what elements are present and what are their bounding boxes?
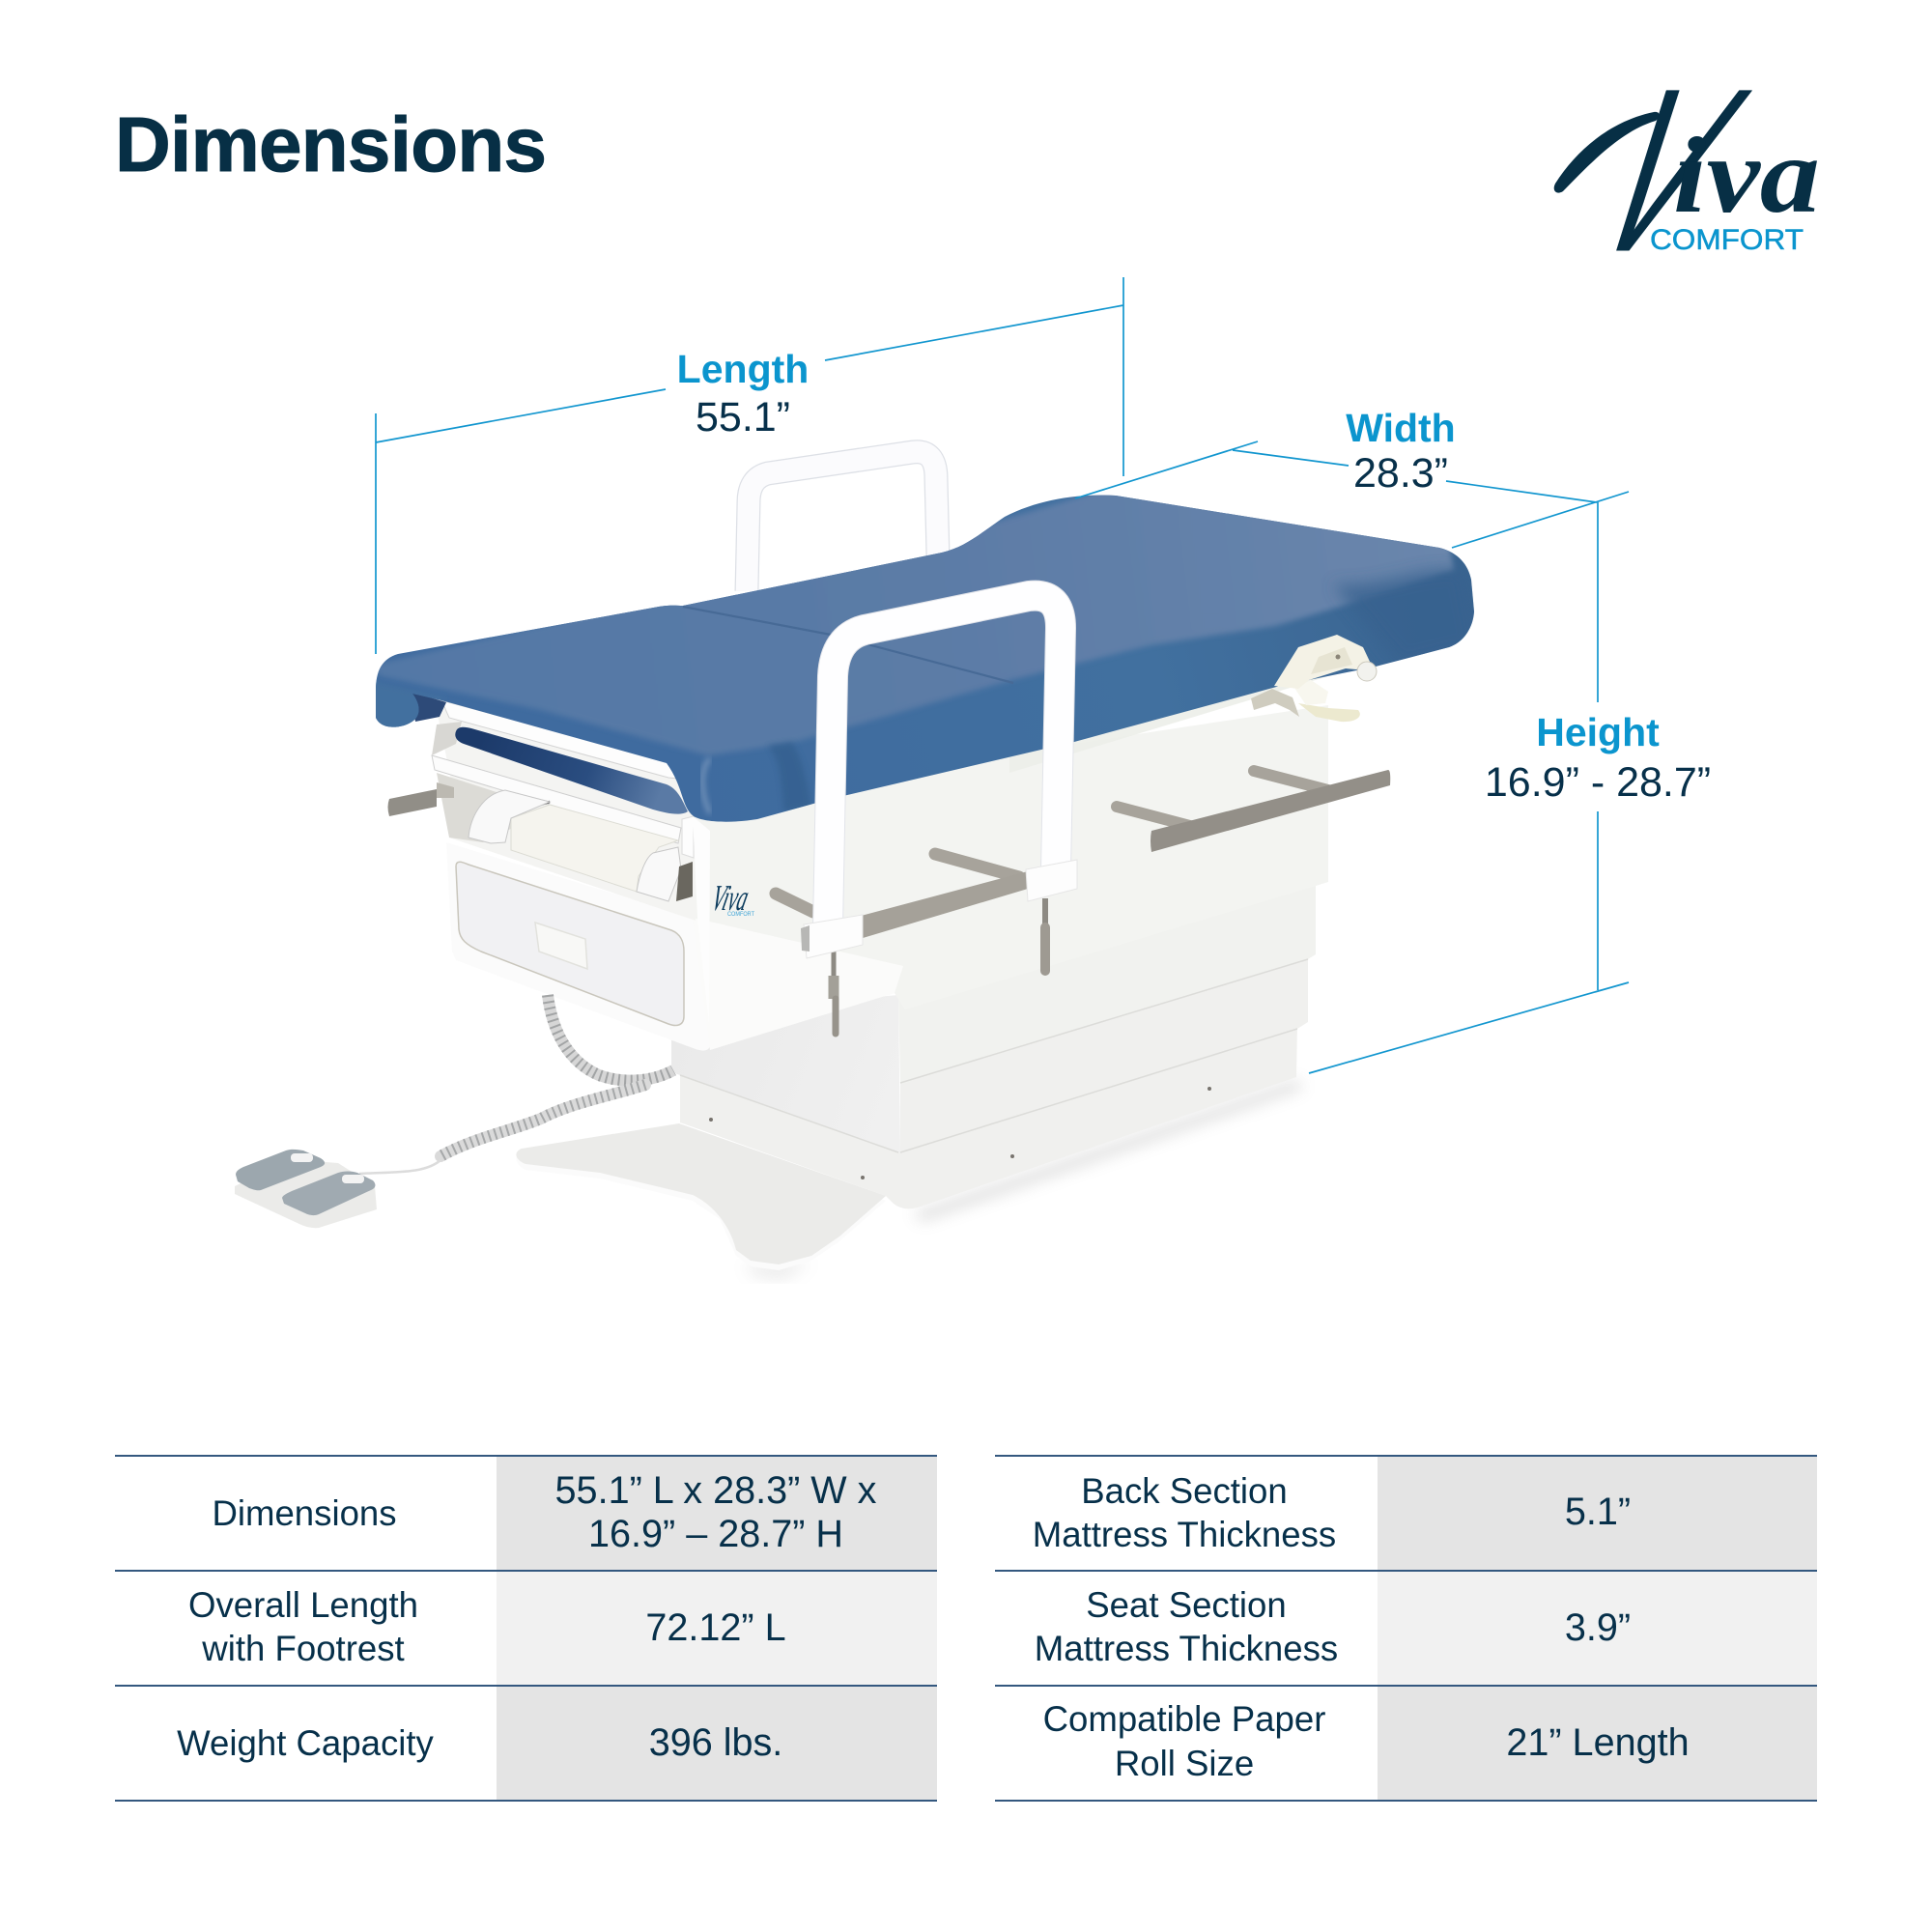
row: dimensions bbox=[212, 1469, 877, 1555]
right rod bbox=[1042, 898, 1048, 927]
mattress bbox=[367, 483, 1488, 831]
drawer handle bbox=[535, 923, 587, 969]
foot pedals bbox=[235, 1150, 377, 1228]
tier front face bbox=[671, 995, 900, 1152]
main housing bbox=[446, 676, 1328, 1051]
side face bbox=[693, 705, 1328, 1050]
left cover bbox=[469, 790, 550, 843]
row: back section: Mattress Thickness bbox=[1033, 1515, 1336, 1554]
coil to housing stripes bbox=[548, 995, 673, 1081]
row: weight capacity: 396 lbs. bbox=[649, 1721, 782, 1764]
back section shadow bbox=[1333, 569, 1478, 667]
top surface bbox=[367, 488, 1454, 755]
white plate bbox=[432, 755, 681, 843]
dark gap bbox=[511, 802, 550, 813]
height lines bbox=[1309, 502, 1629, 1073]
gray wall bbox=[437, 773, 526, 842]
row fills bbox=[497, 1456, 937, 1801]
tier 1 bbox=[898, 879, 1316, 1084]
row: paper roll: 21” Length bbox=[1506, 1721, 1690, 1764]
row: seat section: 3.9” bbox=[1565, 1606, 1631, 1649]
left metal handle bbox=[388, 789, 437, 816]
row: dimensions: Dimensions bbox=[212, 1493, 397, 1533]
left lip side shading bbox=[376, 680, 442, 727]
right clamp bbox=[1026, 860, 1077, 901]
dark recess behind lip bbox=[411, 692, 446, 722]
row: overall length bbox=[188, 1585, 786, 1668]
pin bbox=[1335, 655, 1341, 659]
mechanism back bbox=[437, 705, 696, 921]
tier 2 bbox=[900, 956, 1308, 1152]
corner notch shading bbox=[768, 742, 811, 811]
left rod bbox=[831, 952, 837, 978]
width dimension bbox=[1075, 406, 1629, 548]
length dimension bbox=[376, 277, 1123, 654]
row: seat section: Seat Section bbox=[1086, 1585, 1287, 1625]
footplate shadow bbox=[744, 1264, 811, 1279]
right pedal tag bbox=[342, 1175, 364, 1183]
logo word part: iva bbox=[1673, 116, 1820, 236]
width value: 28.3” bbox=[1353, 450, 1448, 497]
length lines bbox=[376, 277, 1123, 654]
gray upper block bbox=[432, 722, 462, 755]
seam left bbox=[683, 607, 1013, 683]
lift column tiers bbox=[671, 879, 1316, 1208]
clip stem bbox=[1294, 680, 1328, 705]
length label: Length bbox=[677, 347, 809, 391]
back rail bbox=[747, 452, 938, 591]
row: back section: 5.1” bbox=[1565, 1491, 1631, 1533]
panel patch bbox=[1009, 676, 1328, 773]
front rail bbox=[828, 596, 1061, 927]
row: overall length: with Footrest bbox=[201, 1629, 405, 1668]
bar bbox=[850, 871, 1028, 942]
row: paper roll: Compatible Paper bbox=[1043, 1699, 1325, 1739]
roller bbox=[1357, 662, 1377, 681]
length value: 55.1” bbox=[696, 394, 790, 440]
row: overall length: 72.12” L bbox=[645, 1606, 786, 1649]
front corner bbox=[693, 918, 903, 1050]
row rules bbox=[115, 1456, 937, 1801]
footswitch cord bbox=[359, 995, 673, 1174]
width lines bbox=[1075, 441, 1629, 548]
rail clamps and rods bbox=[801, 860, 1077, 1034]
left clamp bbox=[804, 915, 863, 958]
clip inner shade bbox=[1311, 647, 1352, 674]
clip foot bbox=[1298, 703, 1360, 722]
white paper plate bbox=[441, 700, 678, 779]
title: Dimensions bbox=[115, 101, 547, 187]
right side rail bbox=[1117, 770, 1390, 852]
motor box bbox=[511, 805, 678, 892]
left side rail bbox=[776, 854, 1028, 942]
left pedal tag bbox=[291, 1153, 313, 1162]
row: seat section bbox=[1035, 1585, 1631, 1668]
back pin bbox=[1254, 771, 1328, 790]
right pedal bbox=[282, 1171, 375, 1215]
logo subword: COMFORT bbox=[1650, 224, 1804, 256]
mini logo word: Viva bbox=[708, 879, 753, 919]
front face bbox=[446, 842, 710, 1051]
row: back section bbox=[1033, 1471, 1631, 1554]
row: back section: Back Section bbox=[1081, 1471, 1288, 1511]
row: paper roll bbox=[1043, 1699, 1690, 1783]
seat underside cushion bbox=[455, 727, 688, 814]
right cover bbox=[637, 847, 681, 901]
row fills bbox=[1378, 1456, 1817, 1801]
ground shadow bbox=[913, 1080, 1304, 1221]
logo word: V bbox=[1552, 40, 1779, 299]
row: weight capacity: Weight Capacity bbox=[177, 1723, 435, 1763]
tier 3 bbox=[680, 1024, 1297, 1208]
logo: Viva Comfort bbox=[1552, 40, 1820, 299]
height value: 16.9” - 28.7” bbox=[1485, 759, 1711, 806]
metal rod section bbox=[437, 782, 454, 798]
row: weight capacity bbox=[177, 1721, 782, 1764]
row: overall length: Overall Length bbox=[188, 1585, 418, 1625]
dark bracket bbox=[676, 862, 693, 901]
corner highlight bbox=[702, 758, 710, 813]
drawer bbox=[456, 862, 684, 1025]
mini logo subword: COMFORT bbox=[727, 911, 754, 918]
footrest clip hardware bbox=[1251, 635, 1377, 722]
height dimension bbox=[1309, 502, 1711, 1073]
front pin bbox=[1117, 807, 1190, 826]
coil to housing base bbox=[548, 995, 673, 1081]
thin wire bbox=[359, 1160, 440, 1174]
coil to pedal base bbox=[440, 1085, 645, 1156]
base bbox=[235, 1159, 377, 1228]
row: seat section: Mattress Thickness bbox=[1035, 1629, 1338, 1668]
tier seams bbox=[680, 959, 1308, 1152]
bar bbox=[1151, 770, 1390, 852]
metal endcap bbox=[801, 925, 810, 952]
mini logo bbox=[708, 879, 754, 919]
mechanism under seat bbox=[388, 705, 710, 1024]
clip base bbox=[1251, 689, 1299, 717]
spec table right bbox=[995, 1456, 1817, 1801]
left pedal bbox=[236, 1150, 325, 1190]
white tab bbox=[682, 816, 694, 858]
row: dimensions: 55.1” L x 28.3” W x bbox=[555, 1469, 877, 1512]
height label: Height bbox=[1536, 710, 1660, 754]
logo swash bbox=[1554, 112, 1660, 193]
pale frame bbox=[693, 816, 710, 1024]
column screws bbox=[709, 1087, 1211, 1179]
spec table left bbox=[115, 1456, 937, 1801]
exam table illustration bbox=[235, 452, 1488, 1279]
width label: Width bbox=[1346, 406, 1456, 450]
coil to pedal stripes bbox=[440, 1085, 645, 1156]
footplate bbox=[516, 1123, 886, 1270]
row rules bbox=[995, 1456, 1817, 1801]
clip body bbox=[1274, 635, 1371, 689]
row: paper roll: Roll Size bbox=[1115, 1744, 1254, 1783]
row: dimensions: 16.9” – 28.7” H bbox=[588, 1513, 843, 1555]
